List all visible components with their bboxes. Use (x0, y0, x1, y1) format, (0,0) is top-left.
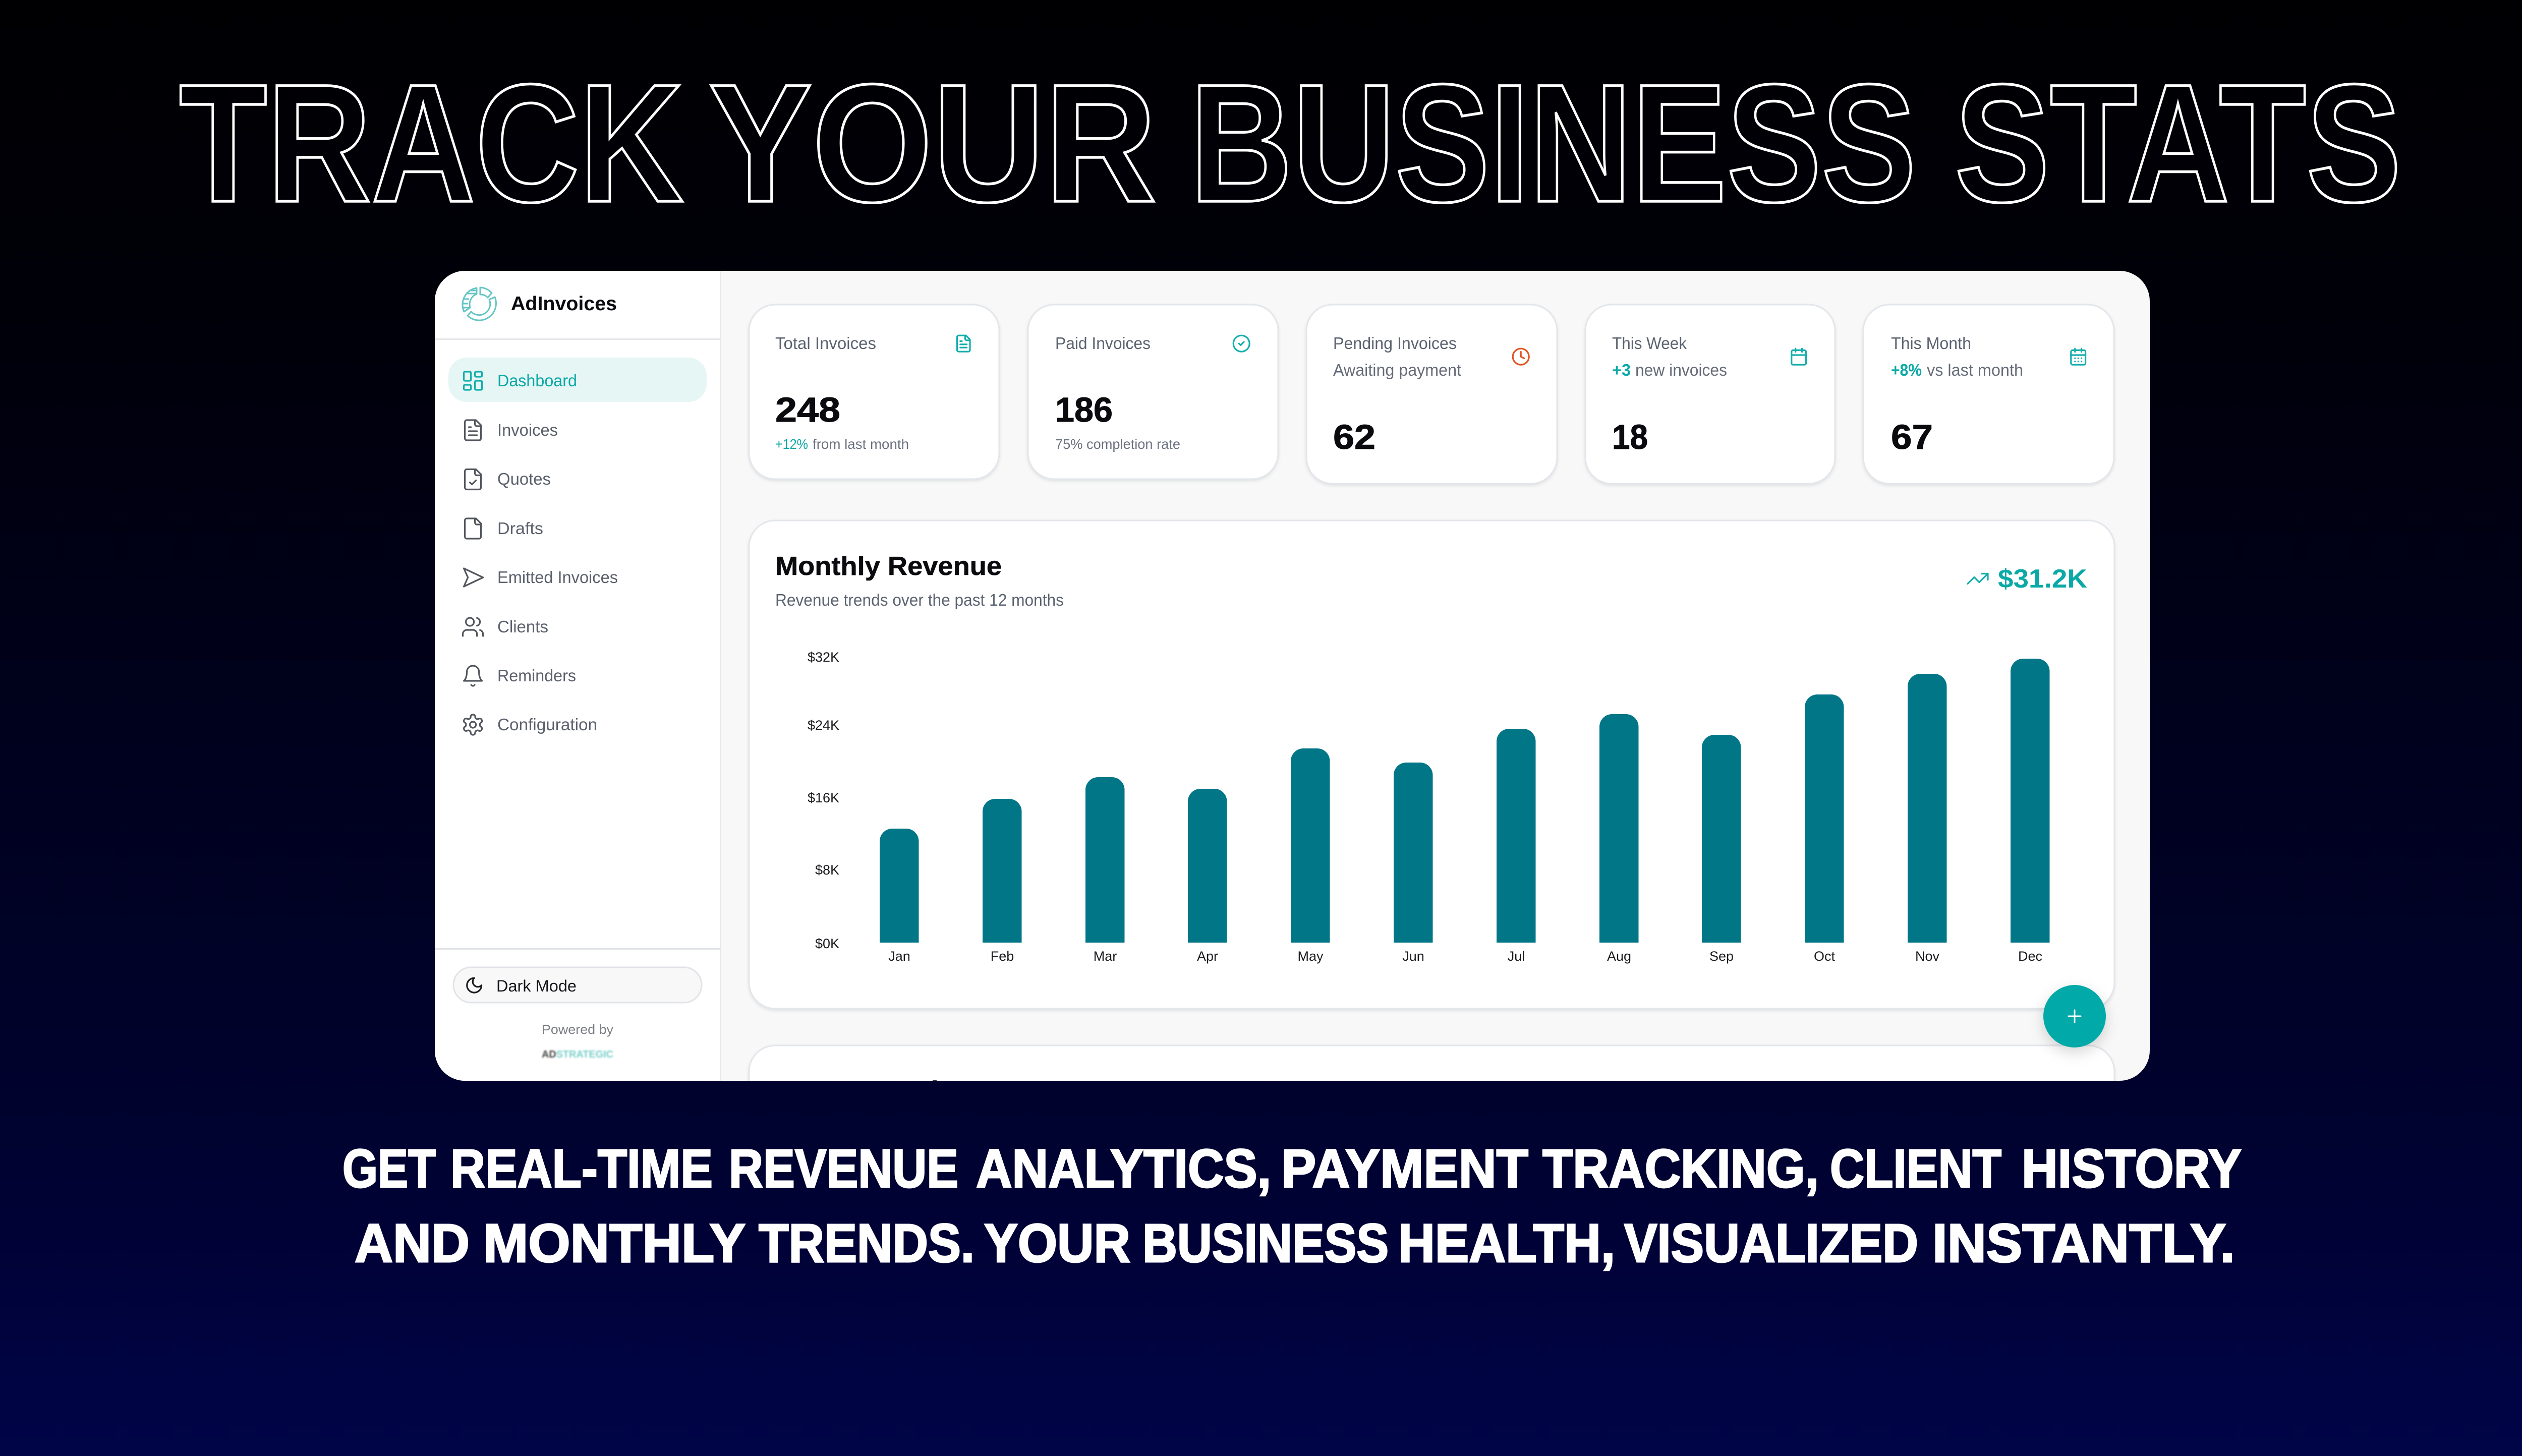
nav item: Invoices: Invoices (497, 421, 558, 439)
brand name: AdInvoices (511, 293, 617, 315)
y axis labels (808, 650, 839, 951)
nav item: Dashboard (active): Dashboard (497, 371, 577, 390)
x axis month labels: Oct (1814, 949, 1835, 964)
stat card: Paid Invoices: 75% completion rate (1055, 436, 1180, 452)
nav item: Emitted Invoices: Emitted Invoices (497, 568, 618, 587)
title: TRACK (179, 49, 683, 237)
nav item: Drafts (465, 518, 543, 539)
brand: AdStrategic logo: ADSTRATEGIC (542, 1049, 613, 1060)
revenue total: $31.2K (1998, 564, 2087, 594)
nav item: Configuration (464, 715, 597, 735)
x axis month labels: Sep (1709, 949, 1734, 964)
panel: monthly revenue chart (749, 520, 2114, 1009)
stat card: This Week: +3 (1612, 361, 1631, 379)
icon: trending up arrow (1968, 574, 1988, 584)
chart heading: Monthly Revenue (775, 552, 1002, 581)
stat card: Pending Invoices: Awaiting payment (1333, 361, 1461, 379)
stat card: This Month (1863, 305, 2114, 484)
nav item: Quotes (465, 469, 551, 489)
x axis month labels: Jan (888, 949, 910, 964)
icon: check circle (1233, 335, 1249, 352)
title: YOUR (709, 49, 1157, 237)
tagline: ANALYTICS, (976, 1138, 1271, 1199)
y axis labels: $0K (815, 936, 839, 951)
stat card: This Week: new invoices (1635, 361, 1727, 379)
stat card: This Week: This Week (1612, 334, 1687, 353)
tagline: CLIENT (1830, 1138, 2001, 1199)
y axis labels: $24K (808, 718, 839, 733)
y axis labels: $16K (808, 790, 839, 805)
x axis month labels: Dec (2018, 949, 2042, 964)
tagline: MONTHLY (483, 1212, 746, 1273)
nav item: Clients (463, 617, 548, 636)
dark mode button: Dark Mode (496, 977, 577, 995)
stat card: This Month: 67 (1891, 418, 1933, 456)
nav item: Reminders: Reminders (497, 666, 576, 685)
stat card: Total Invoices: 248 (775, 390, 840, 429)
stat card: Pending Invoices (1306, 305, 1557, 484)
tagline: TRACKING, (1542, 1138, 1819, 1199)
title: BUSINESS (1190, 49, 1916, 237)
stat card: Pending Invoices: Pending Invoices (1333, 334, 1457, 353)
tagline: GET (342, 1138, 436, 1199)
icon: calendar with dates (2071, 348, 2086, 365)
tagline: HISTORY (2022, 1138, 2242, 1199)
stat card: Paid Invoices (1028, 305, 1278, 479)
x axis month labels: Jul (1508, 949, 1525, 964)
x axis month labels: Feb (991, 949, 1014, 964)
stat card: Total Invoices: from last month (813, 436, 909, 452)
icon: AdInvoices logo (462, 287, 496, 320)
chart subtitle: Revenue trends over the past 12 months (775, 591, 1064, 609)
icon: document (957, 335, 970, 352)
tagline: AND (355, 1212, 470, 1273)
tagline: YOUR (984, 1212, 1130, 1273)
x axis month labels: Aug (1607, 949, 1631, 964)
stat card: Paid Invoices: Paid Invoices (1055, 334, 1151, 353)
nav item: Reminders (464, 666, 576, 686)
tagline: REAL-TIME (450, 1138, 713, 1199)
tagline: HEALTH, (1398, 1212, 1615, 1273)
panel: next card, cut off (749, 1045, 2114, 1146)
stat card: This Week (1585, 305, 1835, 484)
stat card: Pending Invoices: 62 (1333, 418, 1375, 456)
x axis month labels: Apr (1197, 949, 1218, 964)
x axis month labels (888, 949, 2042, 964)
y axis labels: $8K (815, 862, 839, 878)
nav item: Clients: Clients (497, 617, 548, 636)
x axis month labels: Jun (1402, 949, 1424, 964)
tagline: VISUALIZED (1624, 1212, 1918, 1273)
x axis month labels: May (1297, 949, 1324, 964)
nav item: Configuration: Configuration (497, 715, 597, 734)
stat card: Total Invoices: +12% (775, 436, 808, 452)
nav item: Invoices (465, 420, 558, 440)
icon: calendar (1792, 348, 1806, 365)
y axis labels: $32K (808, 650, 839, 665)
panel: sidebar (435, 271, 721, 1081)
nav item: Drafts: Drafts (497, 519, 543, 538)
panel: dashboard screenshot (435, 271, 2150, 1146)
title (179, 49, 2401, 237)
bar chart (880, 659, 2050, 943)
tagline (342, 1138, 2242, 1273)
nav item: Quotes: Quotes (497, 470, 551, 488)
stat card: This Month: vs last month (1927, 361, 2023, 379)
title: STATS (1955, 49, 2401, 237)
powered by: Powered by (542, 1022, 613, 1037)
stat card: This Month: This Month (1891, 334, 1971, 353)
tagline: INSTANTLY. (1932, 1212, 2235, 1273)
x axis month labels: Mar (1094, 949, 1117, 964)
stat card: This Month: +8% (1891, 361, 1922, 379)
nav item: Dashboard (active) (448, 358, 707, 402)
icon: clock (1513, 348, 1529, 365)
floating add button (2043, 985, 2106, 1047)
stat card: Total Invoices (749, 305, 999, 479)
tagline: BUSINESS (1142, 1212, 1389, 1273)
x axis month labels: Nov (1915, 949, 1940, 964)
tagline: PAYMENT (1281, 1138, 1528, 1199)
tagline: TRENDS. (759, 1212, 975, 1273)
stat card: This Week: 18 (1612, 418, 1648, 456)
dark mode button (453, 967, 702, 1003)
stat card: Total Invoices: Total Invoices (775, 334, 876, 353)
tagline: REVENUE (729, 1138, 958, 1199)
stat card: Paid Invoices: 186 (1055, 390, 1113, 429)
